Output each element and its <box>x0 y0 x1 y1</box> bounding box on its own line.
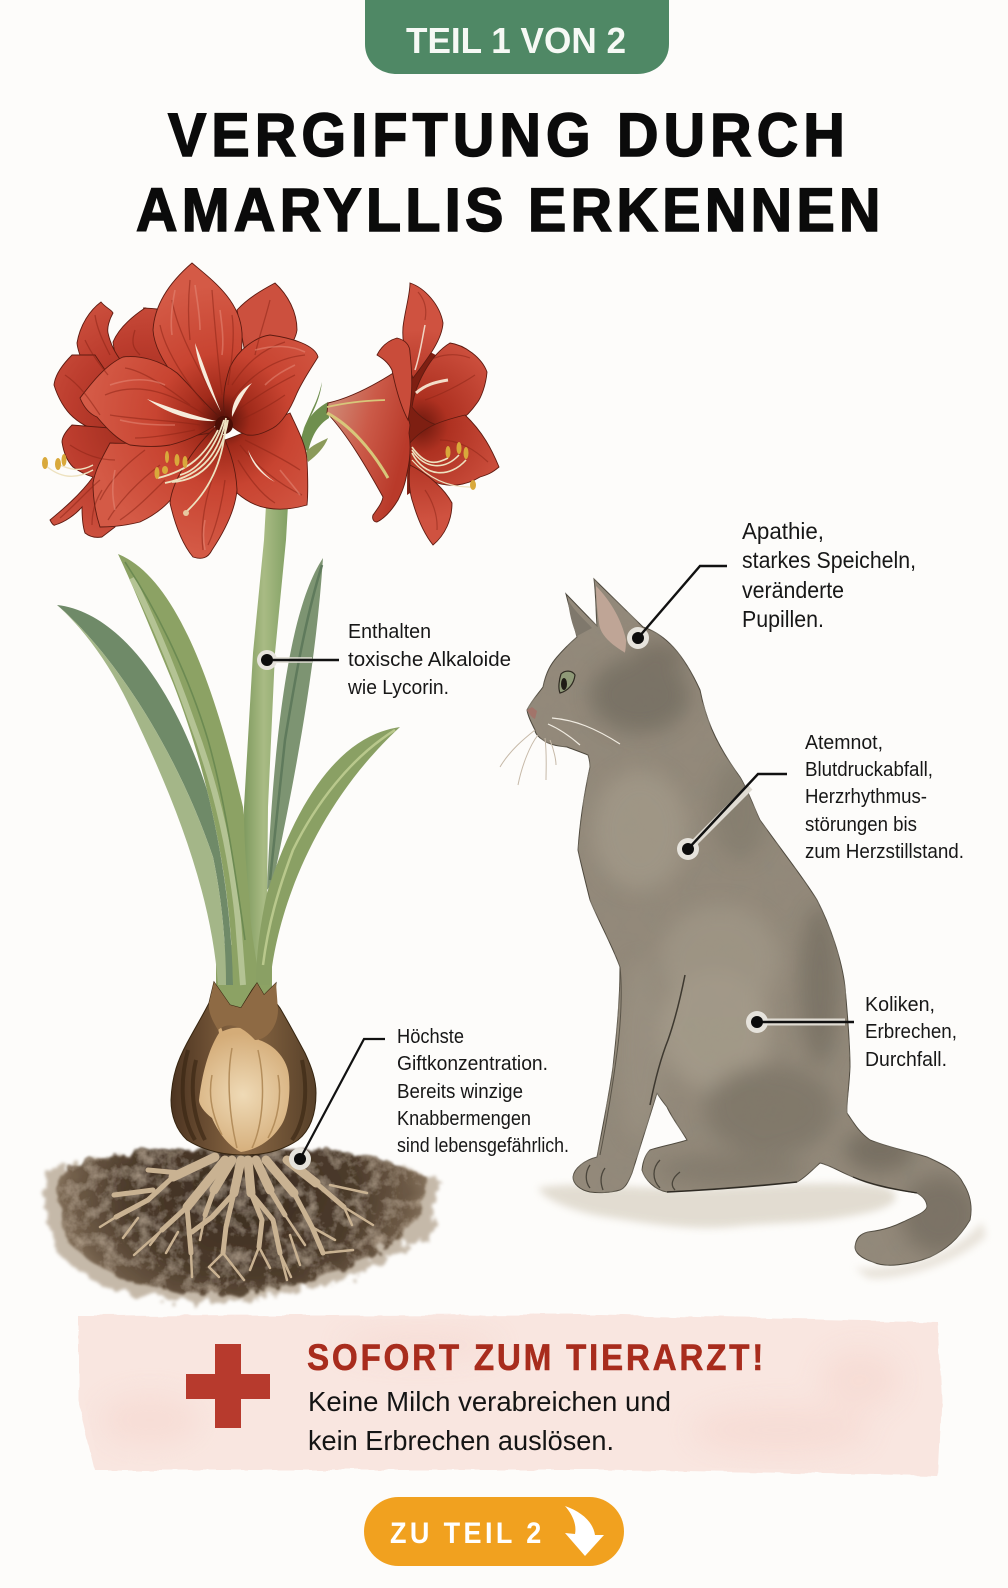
callout: head symptoms: Apathie, <box>742 518 824 544</box>
banner text: Keine Milch verabreichen und <box>308 1386 671 1417</box>
callout: bulb: sind lebensgefährlich. <box>397 1135 569 1157</box>
roots <box>100 1157 373 1280</box>
fur shading <box>590 641 980 1255</box>
soil <box>56 1148 426 1295</box>
callout: stalk toxins <box>257 621 511 699</box>
plant leaves <box>57 554 323 1008</box>
callout: heart and circulation symptoms: Atemnot, <box>805 732 883 754</box>
callout: heart and circulation symptoms: störungen bis <box>805 814 917 836</box>
callout: heart and circulation symptoms <box>677 732 964 863</box>
bulb <box>171 982 316 1155</box>
button: to part 2: ZU TEIL 2 <box>390 1517 541 1550</box>
ground shadow <box>538 1183 896 1228</box>
flower stalk <box>244 505 288 965</box>
cat body <box>527 579 971 1265</box>
white petal streaks <box>147 343 275 482</box>
header tab: part indicator <box>365 0 669 74</box>
back petals of main flower <box>50 283 297 537</box>
banner text: kein Erbrechen auslösen. <box>308 1425 614 1456</box>
callout: digestive symptoms <box>746 994 957 1071</box>
soil fringe <box>45 1154 438 1303</box>
callout: bulb: Höchste <box>397 1026 464 1048</box>
second flower veins and stamens <box>327 292 488 530</box>
callout: digestive symptoms: Erbrechen, <box>865 1021 957 1043</box>
icon: curved down arrow <box>565 1506 604 1556</box>
title: AMARYLLIS ERKENNEN <box>136 175 880 244</box>
callout: stalk toxins: wie Lycorin. <box>347 677 449 699</box>
callout: bulb <box>289 1026 569 1170</box>
front leaf <box>256 727 400 985</box>
callout: head symptoms: starkes Speicheln, <box>742 547 916 573</box>
title <box>136 100 880 244</box>
callout: head symptoms <box>627 518 916 649</box>
callout: digestive symptoms: Durchfall. <box>865 1049 947 1071</box>
button: to part 2 <box>364 1497 624 1566</box>
icon: red cross <box>186 1344 270 1428</box>
banner background wash <box>78 1315 942 1476</box>
petal veins <box>60 280 305 550</box>
banner text <box>308 1386 671 1456</box>
stalk joint and bracts <box>300 382 329 462</box>
face details <box>500 671 917 1193</box>
callout: head symptoms: Pupillen. <box>742 606 824 632</box>
illustration: amaryllis plant <box>42 263 499 1303</box>
callout: heart and circulation symptoms: zum Herzstillstand. <box>805 841 964 863</box>
header tab: part indicator: TEIL 1 VON 2 <box>406 20 626 61</box>
callout: stalk toxins: toxische Alkaloide <box>348 649 511 671</box>
callout: heart and circulation symptoms: Blutdruckabfall, <box>805 759 933 781</box>
callout: bulb: Giftkonzentration. <box>397 1053 548 1075</box>
callout: stalk toxins: Enthalten <box>348 621 431 643</box>
callout: bulb: Knabbermengen <box>397 1108 531 1130</box>
callout: digestive symptoms: Koliken, <box>865 994 935 1016</box>
warning banner <box>78 1315 942 1476</box>
callout: bulb: Bereits winzige <box>397 1081 523 1103</box>
title: VERGIFTUNG DURCH <box>168 100 845 169</box>
main flower petals <box>80 263 318 558</box>
second flower <box>327 283 499 545</box>
main flower stamens <box>45 418 228 512</box>
banner heading: SOFORT ZUM TIERARZT! <box>307 1337 763 1378</box>
ears inner <box>596 586 626 653</box>
callout: head symptoms: veränderte <box>742 577 844 603</box>
illustration: cat <box>500 579 986 1279</box>
banner wash blotches <box>118 1361 886 1446</box>
callout: heart and circulation symptoms: Herzrhythmus- <box>805 786 927 808</box>
